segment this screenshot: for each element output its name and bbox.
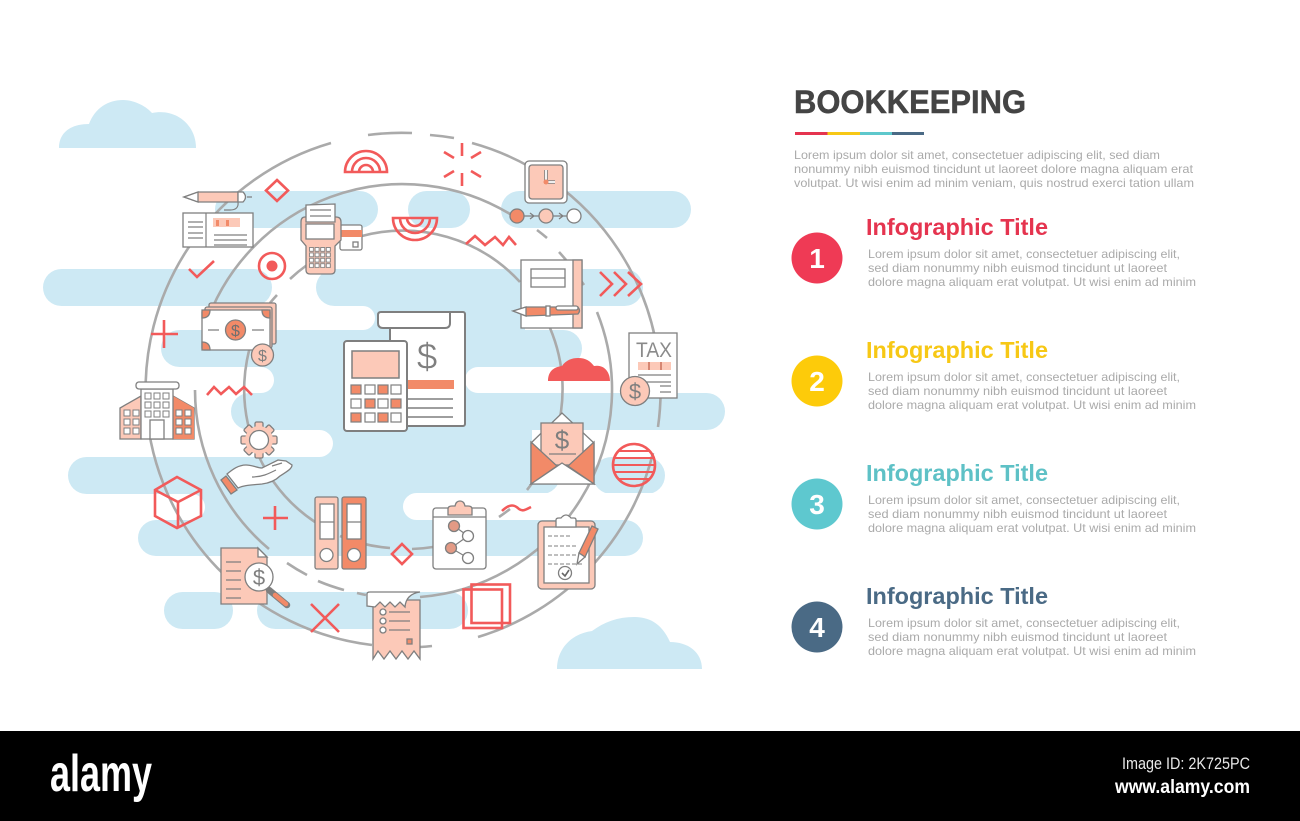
item 4 text: Lorem ipsum dolor sit amet, consectetuer adipiscing elit, — [868, 616, 1180, 630]
icon: tax document with coin: $ — [629, 379, 641, 404]
number badge 1 — [792, 232, 842, 284]
icon: red squiggle — [502, 506, 531, 511]
item 1 — [792, 214, 1196, 289]
icon: audit document with magnifier: $ — [253, 565, 265, 590]
number badge 1: 1 — [809, 243, 825, 274]
number badge 3: 3 — [809, 489, 825, 520]
number badge 2: 2 — [809, 366, 825, 397]
icon: banknotes and coin: $ — [258, 348, 267, 365]
number badge 4: 4 — [809, 612, 825, 643]
item 1 text: Lorem ipsum dolor sit amet, consectetuer adipiscing elit, — [868, 247, 1180, 261]
icon: receipt checklist — [367, 592, 420, 659]
icon: plus — [151, 320, 178, 348]
item 2 text: dolore magna aliquam erat volutpat. Ut wisi enim ad minim — [868, 398, 1196, 412]
item 3 title: Infographic Title — [866, 460, 1048, 486]
icon: envelope with dollar letter — [531, 413, 594, 484]
item 2 text — [868, 370, 1196, 412]
icon: calculator and invoice: $ — [417, 336, 437, 377]
icon: red cross — [311, 604, 339, 632]
item 4 text: sed diam nonummy nibh euismod tincidunt ut laoreet — [868, 630, 1168, 644]
icon: red chevrons — [600, 272, 641, 296]
icon: red striped globe — [613, 444, 655, 486]
icon: target — [259, 253, 285, 279]
intro paragraph — [794, 148, 1194, 190]
item 1 text: dolore magna aliquam erat volutpat. Ut wisi enim ad minim — [868, 275, 1196, 289]
icon: clock — [525, 161, 567, 203]
icon: checklist clipboard with pen — [538, 515, 598, 589]
item 3 — [792, 460, 1196, 535]
icon: audit document with magnifier — [221, 548, 287, 605]
item 1 text: sed diam nonummy nibh euismod tincidunt ut laoreet — [868, 261, 1168, 275]
icon: red arches — [345, 151, 387, 172]
panel: text column — [792, 84, 1196, 658]
item 4 title: Infographic Title — [866, 583, 1048, 609]
item 2 text: Lorem ipsum dolor sit amet, consectetuer adipiscing elit, — [868, 370, 1180, 384]
icon: pencil and ledger — [183, 192, 253, 247]
icon: calculator and invoice — [344, 312, 465, 431]
icon: red diamond — [266, 180, 288, 201]
heading colour underline — [795, 132, 924, 135]
icon: red overlapping squares — [464, 584, 510, 628]
icon: tax document with coin — [620, 333, 677, 406]
intro paragraph: volutpat. Ut wisi enim ad minim veniam, quis nostrud exerci tation ullam — [794, 176, 1194, 190]
image id: Image ID: 2K725PC — [1122, 754, 1250, 773]
icon: red zigzag left — [207, 387, 252, 395]
item 1 text — [868, 247, 1196, 289]
concentric dashed rings — [146, 133, 661, 647]
item 2 — [792, 337, 1196, 412]
item 4 text: dolore magna aliquam erat volutpat. Ut wisi enim ad minim — [868, 644, 1196, 658]
icon: molecule clipboard — [433, 501, 486, 569]
number badge 2 — [792, 356, 842, 406]
item 3 text: sed diam nonummy nibh euismod tincidunt ut laoreet — [868, 507, 1168, 521]
intro paragraph: nonummy nibh euismod tincidunt ut laoreet dolore magna aliquam erat — [794, 162, 1194, 176]
icon: plus lower — [263, 506, 288, 530]
icon: check mark — [189, 261, 214, 277]
watermark footer bar — [0, 731, 1300, 821]
icon: payment terminal and card — [301, 204, 362, 274]
item 2 title: Infographic Title — [866, 337, 1048, 363]
number badge 3 — [792, 478, 842, 530]
intro paragraph: Lorem ipsum dolor sit amet, consectetuer adipiscing elit, sed diam — [794, 148, 1160, 162]
item 2 text: sed diam nonummy nibh euismod tincidunt ut laoreet — [868, 384, 1168, 398]
icon: red half rings — [393, 218, 437, 240]
icon: notebook and pen — [513, 260, 582, 328]
website: www.alamy.com — [1114, 777, 1250, 798]
icon: gear over hand — [221, 422, 292, 494]
icon: process nodes — [510, 209, 581, 223]
item 3 text — [868, 493, 1196, 535]
icon: banknotes and coin: $ — [231, 323, 240, 340]
icon: binders — [315, 497, 366, 569]
icon: banknotes and coin — [202, 303, 276, 366]
heading: BOOKKEEPING — [794, 84, 1026, 120]
icon: red zigzag top — [466, 236, 516, 245]
item 3 text: dolore magna aliquam erat volutpat. Ut wisi enim ad minim — [868, 521, 1196, 535]
background clouds and pills — [43, 100, 765, 669]
item 3 text: Lorem ipsum dolor sit amet, consectetuer adipiscing elit, — [868, 493, 1180, 507]
item 4 — [792, 583, 1196, 658]
icon: red cube — [155, 477, 201, 528]
alamy logo text: alamy — [50, 745, 152, 803]
item 4 text — [868, 616, 1196, 658]
icon: small diamond — [392, 544, 412, 564]
icon: office building — [120, 382, 194, 439]
number badge 4 — [792, 602, 842, 652]
icon: tax document with coin: TAX — [636, 339, 672, 362]
icon: envelope with dollar letter: $ — [555, 425, 570, 455]
icon: red cloud — [548, 358, 610, 381]
item 1 title: Infographic Title — [866, 214, 1048, 240]
panel: bookkeeping illustration — [43, 100, 765, 669]
icon: red starburst — [444, 143, 481, 186]
